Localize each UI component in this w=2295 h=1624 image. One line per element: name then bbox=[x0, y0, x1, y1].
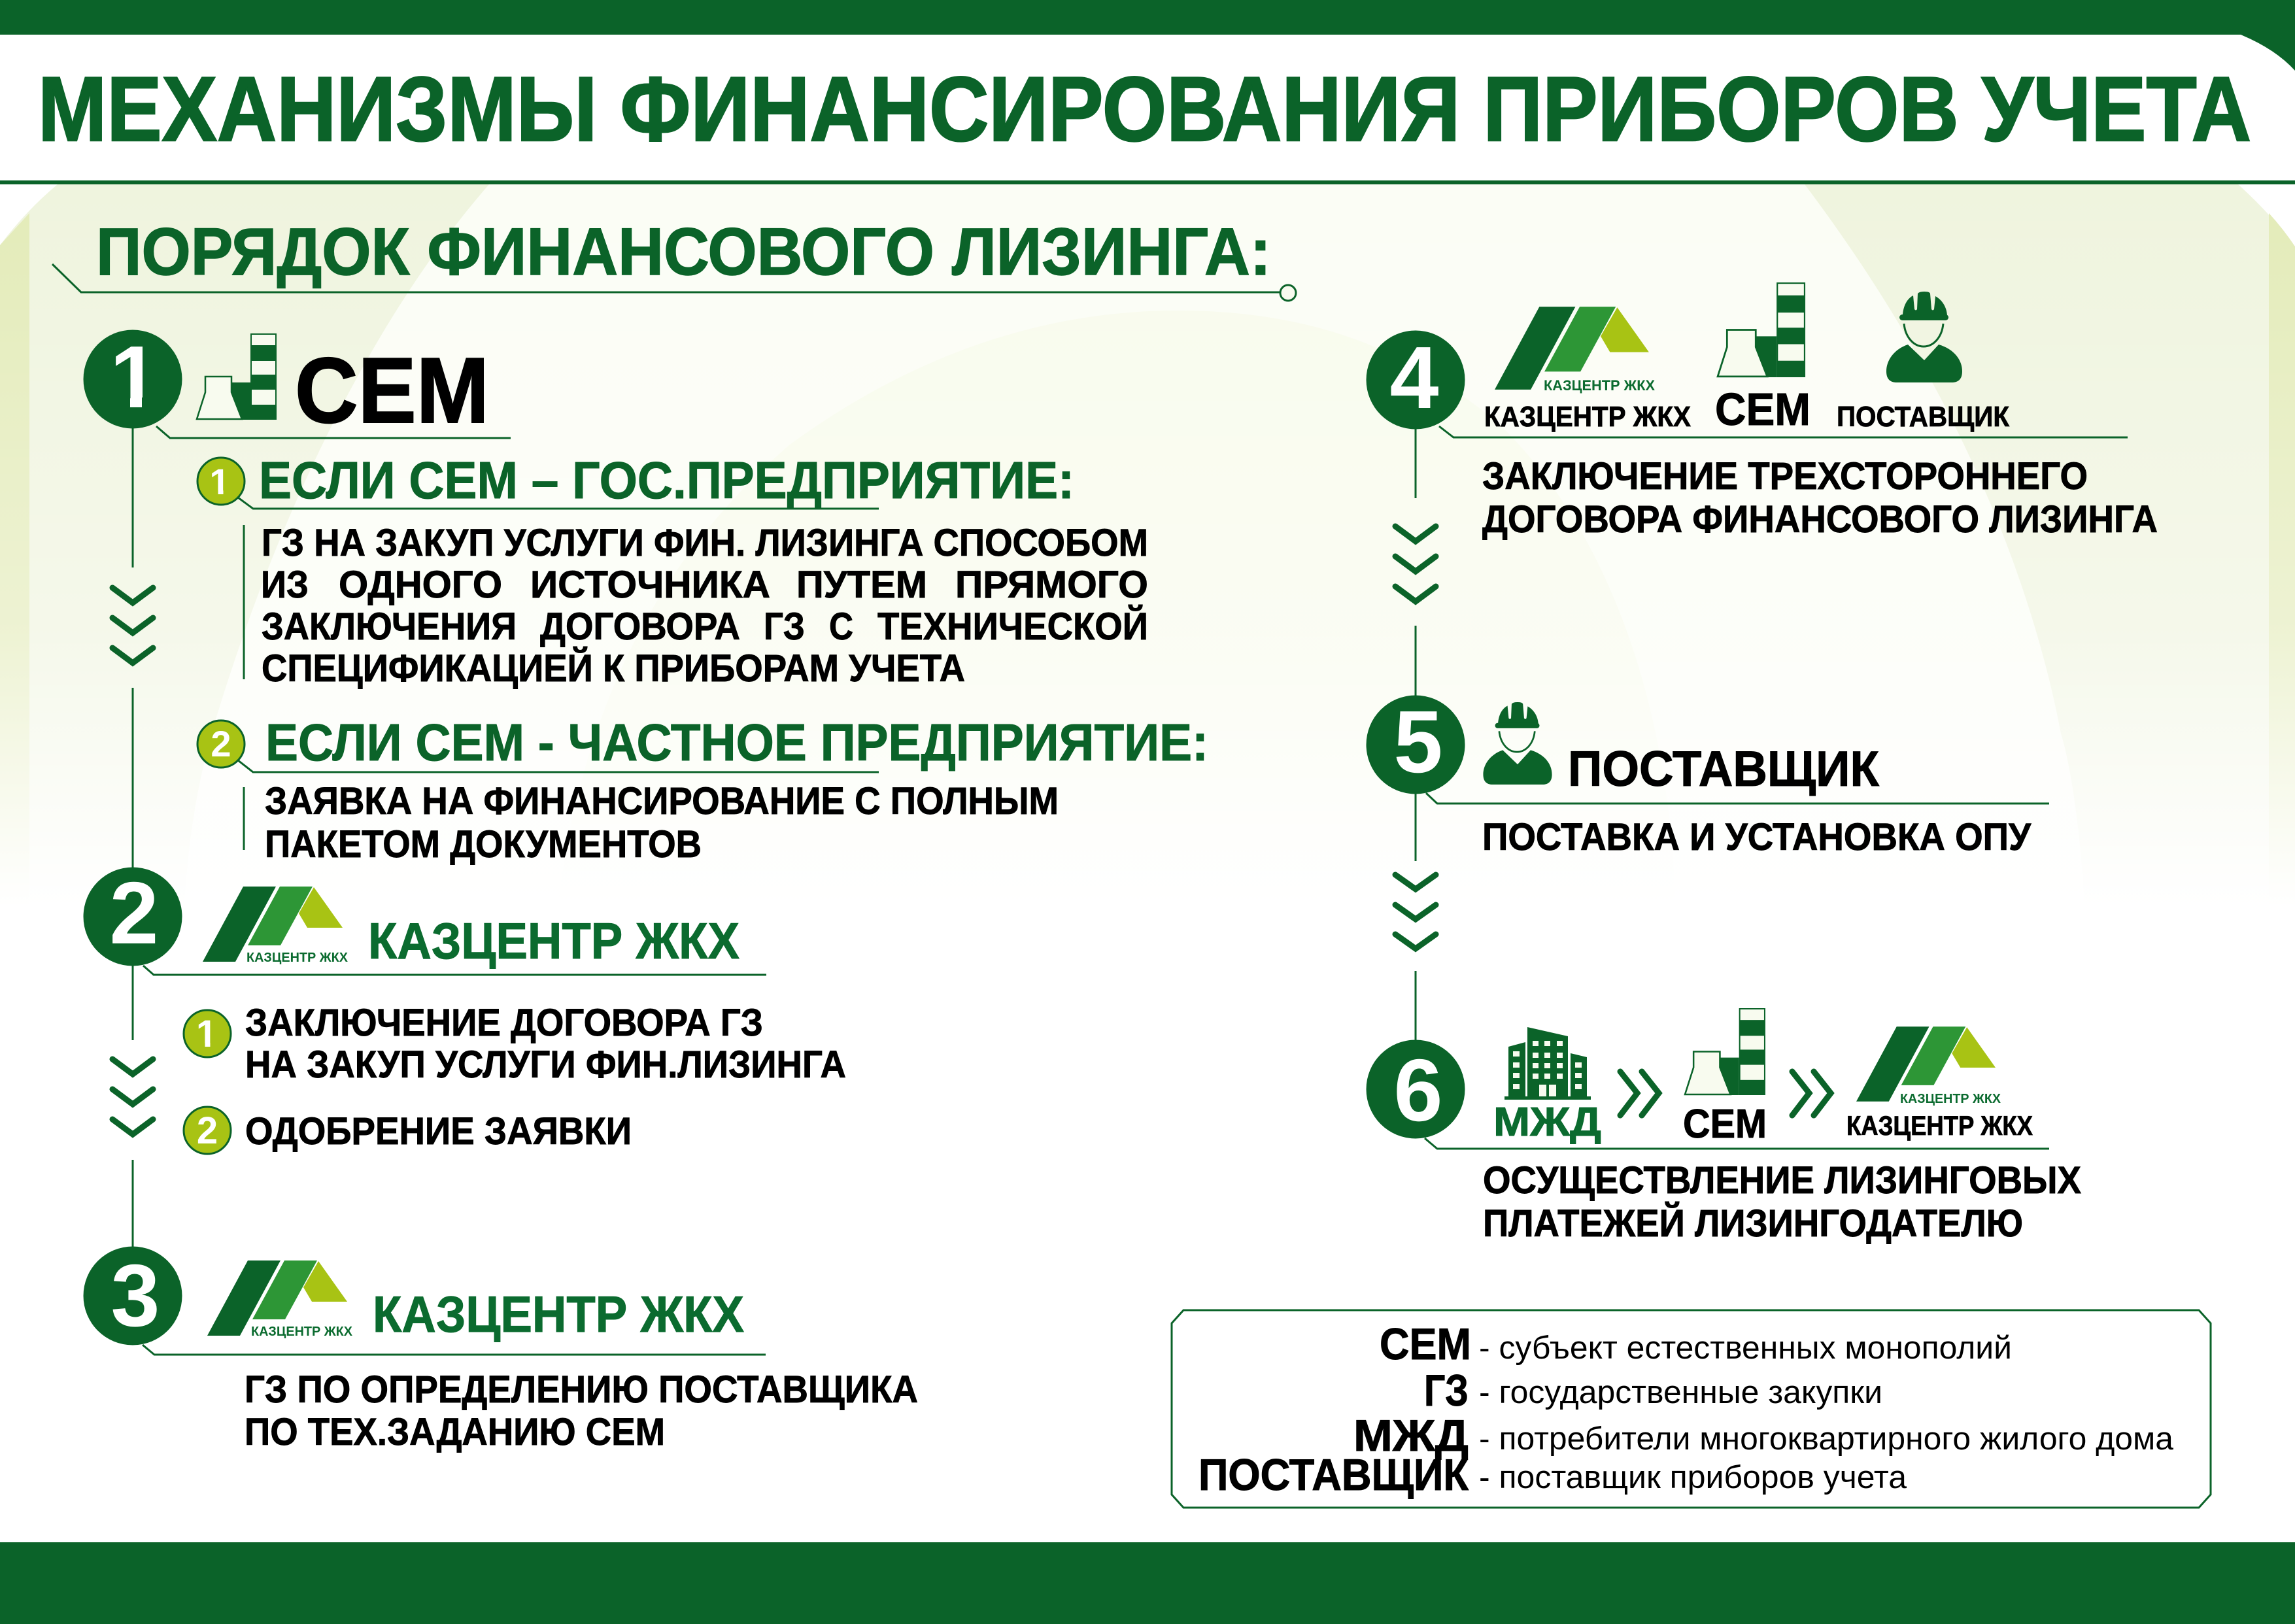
case 2 badge bbox=[197, 720, 245, 768]
building icon bbox=[1504, 1027, 1591, 1100]
participant labels: СЕМ bbox=[1715, 384, 1810, 435]
step 2 badge: 2 bbox=[109, 864, 159, 962]
left timeline connector bbox=[112, 425, 153, 1249]
step 6 bbox=[1367, 1008, 2081, 1245]
case 1 text: С bbox=[829, 605, 853, 648]
residents label: МЖД bbox=[1493, 1100, 1601, 1145]
legend: ГЗ: - государственные закупки bbox=[1479, 1375, 1882, 1410]
step 1 badge bbox=[84, 328, 182, 429]
case 1 text: ПРЯМОГО bbox=[955, 564, 1148, 606]
item 1 badge bbox=[184, 1010, 231, 1057]
legend: СЕМ bbox=[1380, 1319, 2012, 1369]
item 1 text bbox=[245, 1002, 846, 1086]
section heading: ПОРЯДОК ФИНАНСОВОГО ЛИЗИНГА: bbox=[96, 214, 1271, 289]
case 1 bbox=[197, 451, 1148, 690]
legend: МЖД: МЖД bbox=[1353, 1411, 1469, 1461]
step 5 bbox=[1367, 692, 2049, 858]
background panel bbox=[0, 184, 2295, 930]
logo: КАЗЦЕНТР ЖКХ bbox=[246, 951, 348, 965]
step 3 heading: КАЗЦЕНТР ЖКХ bbox=[373, 1285, 744, 1343]
legend: СЕМ: СЕМ bbox=[1380, 1319, 1471, 1369]
worker icon bbox=[1483, 702, 1552, 785]
case 1 heading: ЕСЛИ СЕМ – ГОС.ПРЕДПРИЯТИЕ: bbox=[259, 451, 1074, 509]
case 2 badge: 2 bbox=[211, 723, 231, 764]
case 2 heading: ЕСЛИ СЕМ - ЧАСТНОЕ ПРЕДПРИЯТИЕ: bbox=[265, 713, 1208, 771]
step 3 text: ГЗ ПО ОПРЕДЕЛЕНИЮ ПОСТАВЩИКА bbox=[245, 1368, 918, 1411]
logo: КАЗЦЕНТР ЖКХ bbox=[1900, 1092, 2001, 1106]
participant labels: КАЗЦЕНТР ЖКХ bbox=[1484, 401, 1691, 433]
step 3 text: ПО ТЕХ.ЗАДАНИЮ СЕМ bbox=[245, 1411, 665, 1453]
step 4 badge bbox=[1367, 328, 1465, 429]
factory icon bbox=[1685, 1008, 1765, 1095]
case 1 text: ОДНОГО bbox=[339, 564, 502, 606]
step 6 text bbox=[1483, 1159, 2081, 1245]
step 1 bbox=[84, 328, 1208, 866]
step 4 text: ДОГОВОРА ФИНАНСОВОГО ЛИЗИНГА bbox=[1482, 498, 2158, 541]
case 1 text: ТЕХНИЧЕСКОЙ bbox=[877, 605, 1148, 648]
step 6 badge bbox=[1367, 1040, 1465, 1140]
logo: КАЗЦЕНТР ЖКХ bbox=[1544, 377, 1655, 394]
step 3 bbox=[84, 1246, 918, 1453]
arrow bbox=[1792, 1072, 1831, 1115]
item 2 text: ОДОБРЕНИЕ ЗАЯВКИ bbox=[245, 1110, 632, 1153]
legend bbox=[1172, 1310, 2211, 1508]
step 6 text: ПЛАТЕЖЕЙ ЛИЗИНГОДАТЕЛЮ bbox=[1483, 1202, 2023, 1245]
logo bbox=[1856, 1026, 2001, 1106]
case 1 text: СПЕЦИФИКАЦИЕЙ К ПРИБОРАМ УЧЕТА bbox=[262, 647, 965, 690]
step 4 bbox=[1367, 282, 2158, 541]
kazcenter label: КАЗЦЕНТР ЖКХ bbox=[1846, 1110, 2033, 1141]
item 1 text: ЗАКЛЮЧЕНИЕ ДОГОВОРА ГЗ bbox=[245, 1002, 763, 1044]
step 5 badge: 5 bbox=[1393, 692, 1443, 791]
step 4 text bbox=[1482, 455, 2158, 541]
logo: КАЗЦЕНТР ЖКХ bbox=[251, 1325, 353, 1339]
legend: МЖД: - потребители многоквартирного жилого дома bbox=[1479, 1421, 2174, 1457]
bottom bar bbox=[0, 1542, 2295, 1624]
legend: ПОСТАВЩИК: ПОСТАВЩИК bbox=[1198, 1450, 1469, 1500]
legend: ПОСТАВЩИК: - поставщик приборов учета bbox=[1479, 1460, 1907, 1495]
step 4 text: ЗАКЛЮЧЕНИЕ ТРЕХСТОРОННЕГО bbox=[1482, 455, 2088, 498]
legend: МЖД bbox=[1353, 1411, 2174, 1461]
case 1 text: ДОГОВОРА bbox=[540, 605, 740, 648]
case 2 text: ЗАЯВКА НА ФИНАНСИРОВАНИЕ С ПОЛНЫМ bbox=[265, 780, 1059, 822]
step 3 badge: 3 bbox=[110, 1246, 160, 1345]
step 2 heading: КАЗЦЕНТР ЖКХ bbox=[368, 912, 740, 970]
top bar bbox=[0, 0, 2295, 71]
arrow bbox=[1620, 1072, 1659, 1115]
step 5 badge bbox=[1367, 692, 1465, 794]
header divider bbox=[0, 180, 2295, 184]
company label: СЕМ bbox=[1683, 1102, 1767, 1147]
step 2 bbox=[84, 864, 846, 1154]
logo bbox=[207, 1260, 353, 1339]
case 2 text bbox=[265, 780, 1059, 866]
step 2 badge bbox=[84, 864, 182, 966]
factory icon bbox=[1718, 282, 1805, 377]
item 1 text: НА ЗАКУП УСЛУГИ ФИН.ЛИЗИНГА bbox=[245, 1043, 846, 1086]
legend: ПОСТАВЩИК bbox=[1198, 1450, 1907, 1500]
right timeline connector bbox=[1395, 425, 1436, 1043]
case 1 text: ЗАКЛЮЧЕНИЯ bbox=[262, 605, 517, 648]
legend: ГЗ: ГЗ bbox=[1424, 1366, 1469, 1415]
step 3 badge bbox=[84, 1246, 182, 1345]
legend: СЕМ: - субъект естественных монополий bbox=[1479, 1330, 2012, 1366]
case 1 text: ИСТОЧНИКА bbox=[530, 564, 770, 606]
case 1 text: ПУТЕМ bbox=[796, 564, 927, 606]
participant labels bbox=[1484, 384, 2009, 435]
worker icon bbox=[1886, 292, 1962, 382]
case 1 text: ГЗ bbox=[764, 605, 805, 648]
case 1 text: ИЗ bbox=[261, 564, 309, 606]
step 6 text: ОСУЩЕСТВЛЕНИЕ ЛИЗИНГОВЫХ bbox=[1483, 1159, 2081, 1202]
factory icon bbox=[197, 333, 277, 420]
step 1 heading: СЕМ bbox=[295, 339, 489, 443]
legend: ГЗ bbox=[1424, 1366, 1882, 1415]
case 2 text: ПАКЕТОМ ДОКУМЕНТОВ bbox=[265, 823, 702, 866]
participant labels: ПОСТАВЩИК bbox=[1837, 401, 2009, 433]
step 5 text: ПОСТАВКА И УСТАНОВКА ОПУ bbox=[1482, 816, 2032, 858]
case 1 text: ГЗ НА ЗАКУП УСЛУГИ ФИН. ЛИЗИНГА СПОСОБОМ bbox=[262, 522, 1148, 564]
step 3 text bbox=[245, 1368, 918, 1453]
case 1 text bbox=[261, 522, 1148, 690]
step 5 heading: ПОСТАВЩИК bbox=[1568, 741, 1880, 797]
logo bbox=[203, 887, 348, 965]
item 2 badge bbox=[184, 1107, 231, 1154]
step 4 badge: 4 bbox=[1389, 328, 1439, 427]
case 1 badge bbox=[197, 458, 245, 505]
case 2 bbox=[197, 713, 1208, 866]
logo bbox=[1495, 307, 1655, 394]
step 1 badge: 1 bbox=[110, 328, 159, 426]
item 2 badge: 2 bbox=[197, 1109, 218, 1152]
case 1 badge: 1 bbox=[209, 461, 230, 502]
step 6 badge: 6 bbox=[1393, 1041, 1443, 1140]
item 1 badge: 1 bbox=[196, 1013, 217, 1055]
